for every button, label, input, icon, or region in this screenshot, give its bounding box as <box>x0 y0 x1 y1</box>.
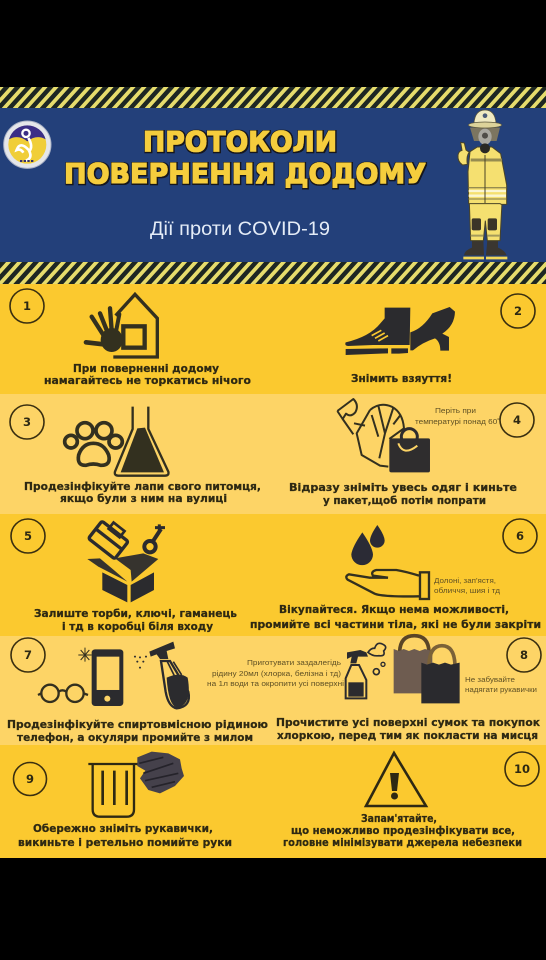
text 6: Вікупайтеся. Якщо нема можливості, <box>279 604 509 616</box>
text 10 <box>283 813 522 849</box>
text 9: викиньте і ретельно помийте руки <box>18 837 232 849</box>
text 1: намагайтесь не торкатись нічого <box>44 375 251 387</box>
step 8 <box>207 636 541 742</box>
note 4: температурі понад 60˚ <box>415 418 500 426</box>
step 7 <box>7 638 268 744</box>
text 5 <box>34 608 237 633</box>
text 1 <box>44 363 251 387</box>
icon: shoes <box>345 307 455 355</box>
text 4: у пакет,щоб потім попрати <box>323 495 486 507</box>
text 5: і тд в коробці біля входу <box>62 621 213 633</box>
icon: flask <box>115 407 169 476</box>
number 4: 4 <box>513 413 521 427</box>
note 4 <box>415 407 500 426</box>
title: ПРОТОКОЛИ <box>143 125 337 158</box>
number 2: 2 <box>514 304 522 318</box>
number 7: 7 <box>24 648 32 662</box>
number 10 <box>505 752 539 786</box>
icon: bin <box>88 764 138 817</box>
icon: shopping bags <box>394 636 460 703</box>
text 8: Прочистите усі поверхні сумок та покупок <box>276 717 540 729</box>
note 8b <box>465 676 537 694</box>
text 10: що неможливо продезінфікувати все, <box>291 825 515 837</box>
text 1: При поверненні додому <box>73 363 219 375</box>
number 7 <box>11 638 45 672</box>
note 8a: Приготувати заздалегідь <box>247 659 341 667</box>
note 8a <box>207 659 345 688</box>
text 8 <box>276 717 540 742</box>
note 8a: на 1л води та окропити усі поверхні <box>207 680 345 688</box>
note 6 <box>434 577 500 595</box>
icon: hand and drops <box>346 525 429 599</box>
step 5 <box>11 516 237 633</box>
number 1: 1 <box>23 299 31 313</box>
band backgrounds <box>0 284 546 858</box>
step 3 <box>10 405 261 505</box>
title <box>64 125 426 190</box>
number 2 <box>501 294 535 328</box>
text 10: Запам'ятайте, <box>361 813 437 825</box>
number 1 <box>10 289 44 323</box>
icon: gloves <box>137 752 184 793</box>
number 3 <box>10 405 44 439</box>
icon: box with items <box>87 516 165 602</box>
number 5 <box>11 519 45 553</box>
icon: hand on house <box>86 294 157 357</box>
text 7: телефон, а окуляри промийте з милом <box>17 732 253 744</box>
text 6: промийте всі частини тіла, які не були закріти <box>250 619 541 631</box>
title: ПОВЕРНЕННЯ ДОДОМУ <box>64 157 426 190</box>
note 8b: надягати рукавички <box>465 687 537 694</box>
text 6 <box>250 604 541 631</box>
step 4 <box>289 399 534 507</box>
header banner <box>0 87 546 284</box>
number 3: 3 <box>23 415 31 429</box>
step 9 <box>14 752 232 849</box>
number 8 <box>507 638 541 672</box>
note 6: обличчя, шия і тд <box>434 587 500 595</box>
number 8: 8 <box>520 648 528 662</box>
number 5: 5 <box>24 529 32 543</box>
text 3 <box>24 481 261 505</box>
text 8: хлоркою, перед тим як покласти на мисця <box>277 730 538 742</box>
note 4: Періть при <box>435 407 476 415</box>
number 9: 9 <box>26 772 34 786</box>
logo <box>4 121 51 168</box>
text 3: Продезінфікуйте лапи свого питомця, <box>24 481 261 493</box>
text 2: Знімить взяуття! <box>351 373 452 385</box>
bottom hazard stripes <box>0 262 546 284</box>
icon: glasses <box>38 685 88 702</box>
text 4 <box>289 482 517 507</box>
text 4: Відразу зніміть увесь одяг і киньте <box>289 482 517 494</box>
icon: clothes and bag <box>337 399 430 472</box>
icon: paw <box>65 423 122 465</box>
step 2 <box>345 294 535 385</box>
number 9 <box>14 762 46 796</box>
text 10: головне мінімізувати джерела небезпеки <box>283 837 522 849</box>
subtitle: Дії проти COVID-19 <box>150 219 330 240</box>
text 5: Залиште торби, ключі, гаманець <box>34 608 237 620</box>
text 7: Продезінфікуйте спиртовмісною рідиною <box>7 719 268 731</box>
number 6: 6 <box>516 529 524 543</box>
text 7 <box>7 719 268 744</box>
icon: warning triangle <box>366 753 426 806</box>
firefighter illustration <box>458 110 507 258</box>
top hazard stripes <box>0 87 546 108</box>
icon: phone <box>78 648 123 706</box>
note 6: Долоні, зап'ястя, <box>434 577 496 585</box>
number 10: 10 <box>514 762 530 776</box>
step 6 <box>250 519 541 631</box>
step 1 <box>10 289 251 387</box>
text 9 <box>18 823 232 849</box>
step 10 <box>283 752 539 849</box>
number 6 <box>503 519 537 553</box>
note 8b: Не забувайте <box>465 676 515 684</box>
text 9: Обережно зніміть рукавички, <box>33 823 213 835</box>
text 3: якщо були з ним на вулиці <box>60 493 227 505</box>
note 8a: рідину 20мл (хлорка, белізна і тд) <box>212 670 341 678</box>
icon: spray and cloud <box>346 643 386 698</box>
number 4 <box>500 403 534 437</box>
icon: spray bottle <box>134 642 189 708</box>
